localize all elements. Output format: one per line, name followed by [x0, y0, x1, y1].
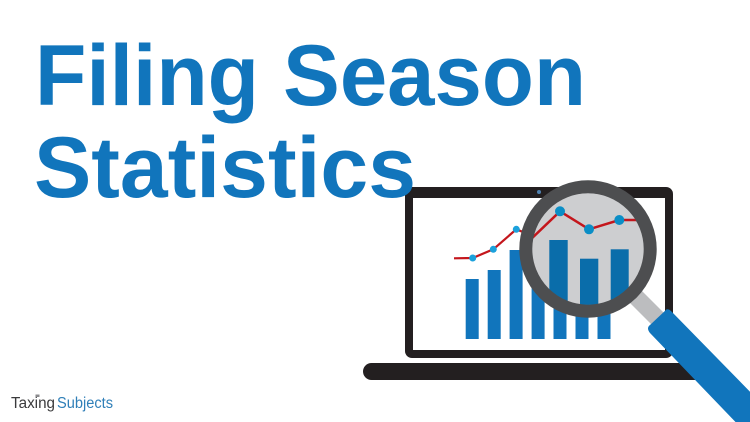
line chart: [454, 226, 535, 262]
laptop base: [363, 363, 713, 380]
magnifying glass: [526, 187, 750, 422]
laptop screen: [413, 198, 665, 350]
title: [34, 28, 586, 216]
magnifier ring: [526, 187, 650, 311]
title: Season: [283, 28, 586, 124]
bar chart: [466, 250, 610, 339]
magnifier neck: [632, 293, 660, 321]
laptop: [363, 187, 713, 380]
logo: Taxing Subjects: Taxing: [11, 395, 55, 412]
webcam: [537, 190, 541, 194]
magnifier handle: [648, 309, 750, 422]
logo: Taxing Subjects: Subjects: [57, 395, 113, 412]
magnified chart: [533, 206, 636, 305]
lens: [532, 193, 644, 305]
title: Filing: [35, 28, 259, 124]
laptop screen bezel: [405, 187, 673, 358]
logo: Taxing Subjects: [11, 394, 113, 412]
title: Statistics: [34, 120, 416, 216]
